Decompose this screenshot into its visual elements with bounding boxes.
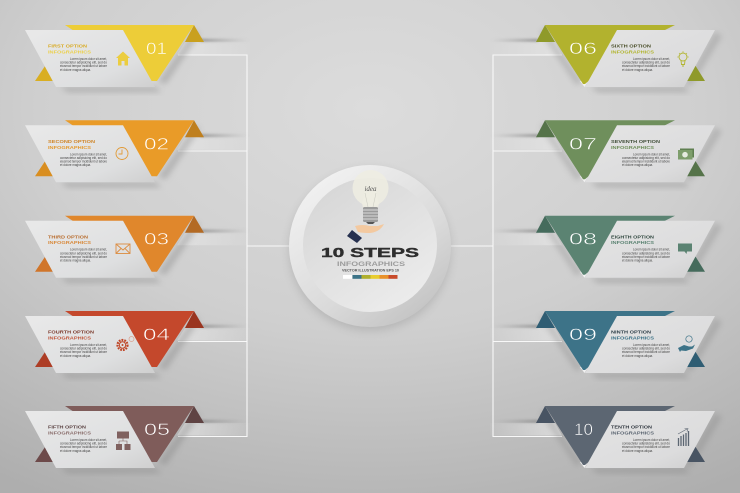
step 06: consectetur adipisicing elit, sed do xyxy=(622,61,670,65)
connector lines: right xyxy=(450,55,562,436)
step 01: eiusmod tempor incididunt ut labore xyxy=(60,64,107,68)
step 10: Lorem ipsum dolor sit amet, xyxy=(633,438,670,442)
step 06: Lorem ipsum dolor sit amet, xyxy=(633,57,670,61)
step 06: INFOGRAPHICS xyxy=(611,50,654,54)
step 02: INFOGRAPHICS xyxy=(48,145,91,150)
step 03: eiusmod tempor incididunt ut labore xyxy=(60,255,107,259)
step 05: et dolore magna aliqua. xyxy=(60,449,91,453)
step 09: consectetur adipisicing elit, sed do xyxy=(622,347,670,351)
step 06 xyxy=(490,25,722,92)
step 08: EIGHTH OPTION xyxy=(611,234,655,239)
step 08: 08 xyxy=(569,230,597,249)
step 02: SECOND OPTION xyxy=(48,139,96,144)
step 08: consectetur adipisicing elit, sed do xyxy=(622,251,670,255)
step 06: 06 xyxy=(569,39,597,58)
step 02: et dolore magna aliqua. xyxy=(60,163,91,167)
step 09: et dolore magna aliqua. xyxy=(622,354,653,358)
step 04: eiusmod tempor incididunt ut labore xyxy=(60,350,107,354)
step 07: SEVENTH OPTION xyxy=(611,139,661,144)
step 05 xyxy=(25,406,250,473)
step 04: et dolore magna aliqua. xyxy=(60,354,91,358)
icon: clock xyxy=(116,148,128,160)
step 01: Lorem ipsum dolor sit amet, xyxy=(70,57,107,61)
step 07: 07 xyxy=(569,134,597,153)
icon: presentation xyxy=(116,432,130,450)
outer disc xyxy=(289,165,451,327)
step 01: FIRST OPTION xyxy=(48,44,88,49)
step 01 xyxy=(25,25,250,92)
step 04: Lorem ipsum dolor sit amet, xyxy=(70,343,107,347)
step 01: INFOGRAPHICS xyxy=(48,50,91,54)
icon: light bulb outline xyxy=(677,51,689,66)
color strip xyxy=(343,275,398,279)
step 10: INFOGRAPHICS xyxy=(611,430,654,436)
step 08: INFOGRAPHICS xyxy=(611,240,654,245)
step 07: consectetur adipisicing elit, sed do xyxy=(622,156,670,160)
icon: hand xyxy=(347,224,384,243)
step 09: Lorem ipsum dolor sit amet, xyxy=(633,343,670,347)
icon: banknote xyxy=(678,148,694,160)
step 07: et dolore magna aliqua. xyxy=(622,163,653,167)
step 03: consectetur adipisicing elit, sed do xyxy=(60,251,107,255)
step 01: consectetur adipisicing elit, sed do xyxy=(60,61,107,65)
step 05: 05 xyxy=(144,420,170,439)
step 02: consectetur adipisicing elit, sed do xyxy=(60,156,107,160)
step 09: INFOGRAPHICS xyxy=(611,336,654,340)
step 07: eiusmod tempor incididunt ut labore xyxy=(622,160,670,164)
step 05: consectetur adipisicing elit, sed do xyxy=(60,442,107,446)
step 10: 10 xyxy=(574,420,593,439)
step 08: et dolore magna aliqua. xyxy=(622,258,653,262)
step 02: Lorem ipsum dolor sit amet, xyxy=(70,152,107,156)
step 10: eiusmod tempor incididunt ut labore xyxy=(622,445,670,449)
step 10: et dolore magna aliqua. xyxy=(622,449,653,453)
icon: light bulb: idea xyxy=(364,185,377,193)
step 02: 02 xyxy=(144,134,169,153)
step 04: 04 xyxy=(143,325,170,344)
step 04: FOURTH OPTION xyxy=(48,330,95,335)
step 09: 09 xyxy=(569,325,597,344)
step 06: et dolore magna aliqua. xyxy=(622,68,653,72)
icon: speech bubble xyxy=(678,244,692,254)
step 09 xyxy=(490,311,722,378)
central circle badge xyxy=(289,165,451,330)
step 03: 03 xyxy=(144,230,169,249)
icon: home xyxy=(116,52,130,66)
step 08 xyxy=(490,216,722,283)
step 09: NINTH OPTION xyxy=(611,330,652,335)
icon: bar chart xyxy=(678,428,688,446)
step 05: eiusmod tempor incididunt ut labore xyxy=(60,445,107,449)
step 03: THIRD OPTION xyxy=(48,234,89,239)
step 02: eiusmod tempor incididunt ut labore xyxy=(60,160,107,164)
step 04: INFOGRAPHICS xyxy=(48,336,91,340)
step 05: FIFTH OPTION xyxy=(48,425,87,430)
step 04 xyxy=(25,311,250,378)
step 07: Lorem ipsum dolor sit amet, xyxy=(633,152,670,156)
icon: envelope xyxy=(116,244,130,254)
step 06: SIXTH OPTION xyxy=(611,44,652,49)
step 04: consectetur adipisicing elit, sed do xyxy=(60,347,107,351)
step 03: Lorem ipsum dolor sit amet, xyxy=(70,248,107,252)
step 01: 01 xyxy=(146,39,167,58)
heading: 10 steps: 10 STEPS xyxy=(321,245,420,260)
step 07 xyxy=(490,120,722,187)
step 08: Lorem ipsum dolor sit amet, xyxy=(633,248,670,252)
step 10: consectetur adipisicing elit, sed do xyxy=(622,442,670,446)
icon: light bulb xyxy=(352,170,388,224)
step 03 xyxy=(25,216,250,283)
step 02 xyxy=(25,120,250,187)
step 07: INFOGRAPHICS xyxy=(611,145,654,150)
inner disc xyxy=(303,178,437,312)
icon: hand with coin xyxy=(678,336,695,352)
step 09: eiusmod tempor incididunt ut labore xyxy=(622,350,670,354)
step 06: eiusmod tempor incididunt ut labore xyxy=(622,64,670,68)
step 10 xyxy=(490,406,722,473)
step 05: Lorem ipsum dolor sit amet, xyxy=(70,438,107,442)
connector lines: left xyxy=(178,55,292,436)
icon: gears xyxy=(118,336,134,350)
subheading: infographics: INFOGRAPHICS xyxy=(337,261,406,268)
step 08: eiusmod tempor incididunt ut labore xyxy=(622,255,670,259)
step 05: INFOGRAPHICS xyxy=(48,430,91,436)
caption: VECTOR ILLUSTRATION EPS 10 xyxy=(342,268,399,272)
step 03: INFOGRAPHICS xyxy=(48,240,91,245)
step 10: TENTH OPTION xyxy=(611,425,653,430)
step 01: et dolore magna aliqua. xyxy=(60,68,91,72)
step 03: et dolore magna aliqua. xyxy=(60,258,91,262)
